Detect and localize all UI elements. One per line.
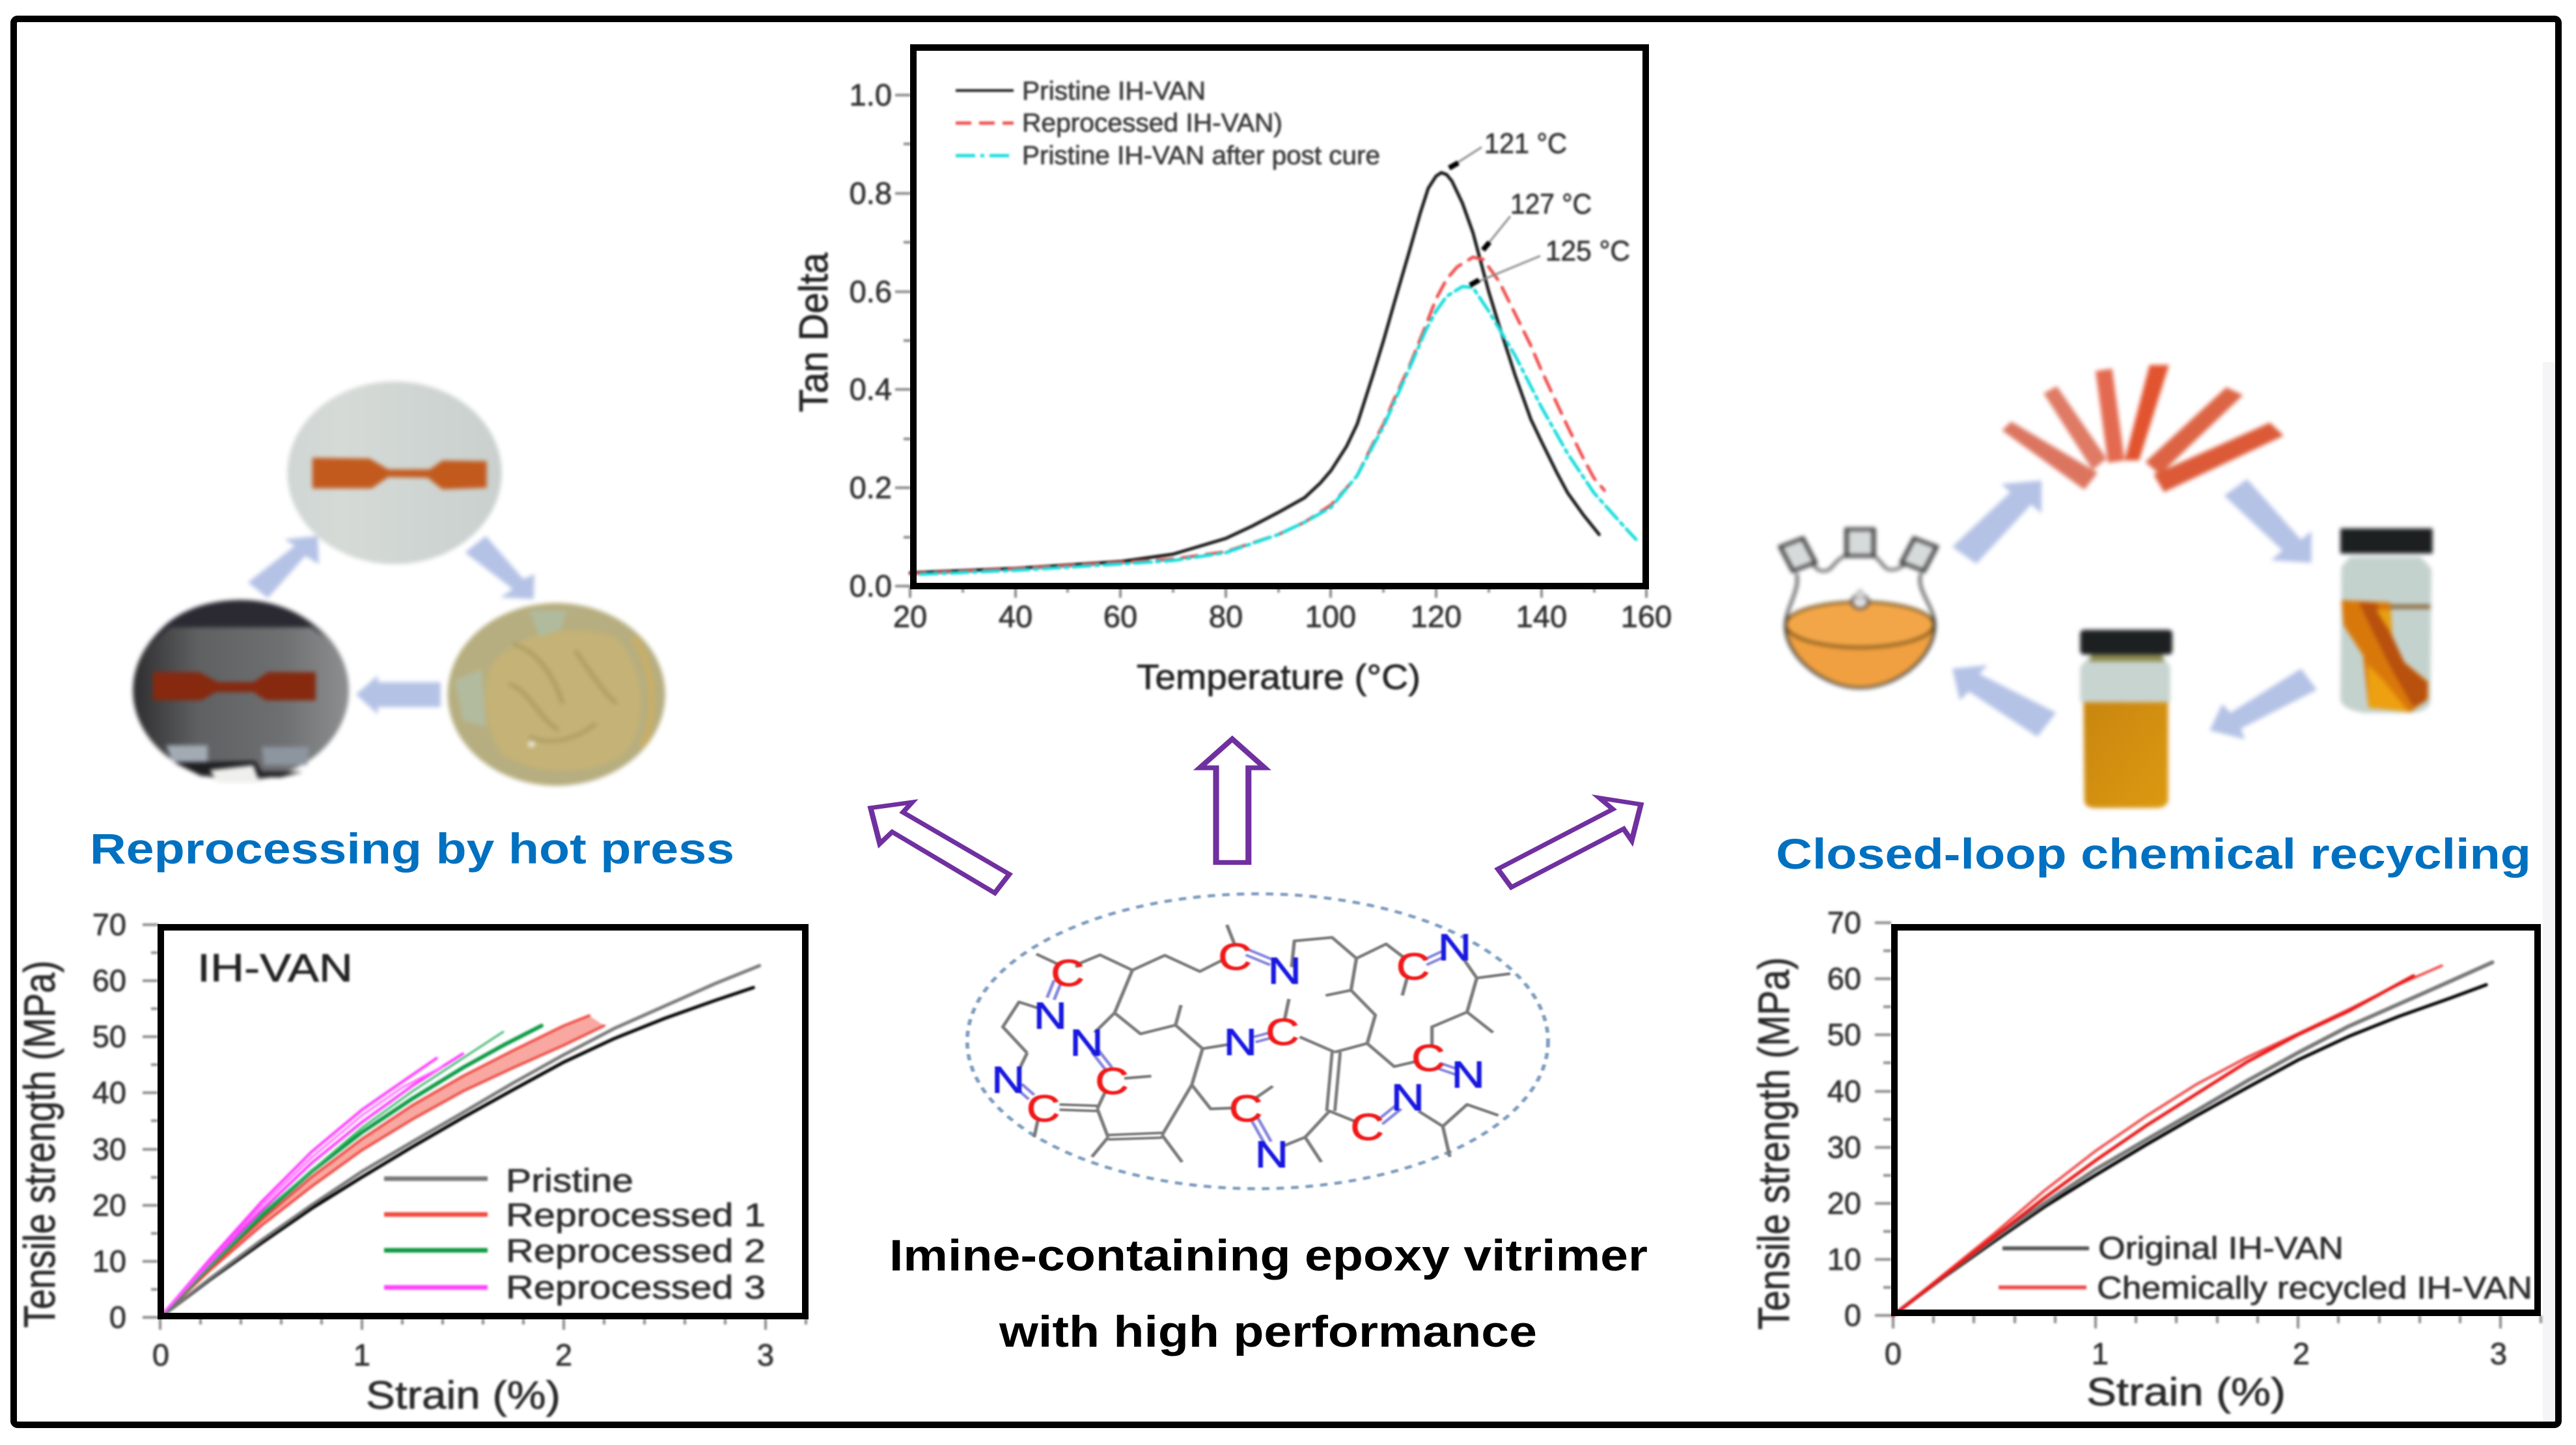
carbon atoms: C — [1396, 945, 1430, 987]
legend: Original IH-VAN — [2098, 1231, 2344, 1266]
arrow: specimen to powder — [465, 536, 534, 599]
y axis numbers: 70 — [1827, 905, 1861, 940]
photo: vial of recycled solution — [2080, 630, 2172, 808]
arrow: to reprocessing — [870, 802, 1009, 893]
x axis numbers: 80 — [1209, 599, 1243, 634]
x axis numbers: 2 — [555, 1338, 572, 1372]
x axis numbers: 40 — [999, 599, 1032, 634]
carbon atoms: C — [1350, 1106, 1384, 1148]
nitrogen atoms: N — [1070, 1022, 1103, 1064]
x axis numbers: 160 — [1621, 599, 1672, 634]
double bonds — [1060, 1052, 1340, 1140]
single bonds — [1003, 925, 1510, 1162]
legend — [1999, 1231, 2532, 1306]
y axis numbers: 0.0 — [850, 568, 892, 603]
nitrogen atoms: N — [1438, 926, 1471, 968]
nitrogen atoms: N — [1391, 1076, 1424, 1118]
photo: ground powder disc — [448, 603, 665, 786]
y axis title: Tan Delta — [792, 253, 837, 412]
y axis title: Tensile strength (MPa) — [15, 961, 64, 1328]
heading: reprocessing by hot press: Reprocessing by hot press — [90, 824, 734, 873]
x axis title: Strain (%) — [366, 1373, 561, 1417]
x axis numbers: 60 — [1103, 599, 1137, 634]
curves — [1893, 962, 2493, 1315]
y axis numbers: 60 — [1827, 961, 1861, 996]
legend: Pristine IH-VAN — [1022, 77, 1206, 105]
chart: chemically recycled tensile curves — [1749, 905, 2541, 1414]
panel: closed-loop chemical recycling cycle — [1780, 365, 2433, 808]
y axis numbers: 0.4 — [850, 372, 892, 406]
legend: Reprocessed 2 — [506, 1233, 766, 1269]
arrow: to tan delta chart — [1200, 739, 1265, 862]
legend: Reprocessed 3 — [506, 1269, 766, 1306]
heading: closed-loop chemical recycling: Closed-loop chemical recycling — [1776, 830, 2531, 878]
photo: vial with dissolving strip — [2340, 529, 2433, 713]
x axis numbers: 100 — [1305, 599, 1356, 634]
y axis numbers: 0.2 — [850, 470, 892, 505]
carbon atoms: C — [1266, 1011, 1299, 1053]
y axis numbers — [92, 907, 126, 1334]
y axis numbers — [1827, 905, 1861, 1332]
x axis numbers: 2 — [2293, 1336, 2310, 1371]
photo: disc with dog-bone specimen — [287, 382, 502, 564]
y axis numbers: 0.6 — [850, 274, 892, 309]
y axis numbers: 40 — [92, 1075, 126, 1110]
nitrogen atoms — [991, 926, 1485, 1175]
nitrogen atoms: N — [1034, 994, 1067, 1037]
carbon atoms: C — [1218, 936, 1252, 978]
x axis numbers: 120 — [1411, 599, 1461, 634]
carbon atoms: C — [1027, 1087, 1060, 1130]
peak annotations — [1449, 128, 1630, 285]
nitrogen atoms: N — [1451, 1054, 1485, 1095]
y axis numbers: 1.0 — [850, 77, 892, 112]
y axis numbers: 10 — [1827, 1242, 1861, 1276]
y axis numbers: 50 — [1827, 1017, 1861, 1052]
title: imine-containing epoxy vitrimer: with high performance — [999, 1307, 1537, 1356]
y axis numbers: 70 — [92, 907, 126, 942]
x axis numbers — [152, 1338, 774, 1372]
panel label: IH-VAN — [197, 946, 353, 990]
x axis numbers — [893, 599, 1672, 634]
photo: cut resin strips — [2002, 365, 2284, 492]
panel: imine polymer network and hollow arrows — [870, 739, 1641, 1188]
y axis numbers: 50 — [92, 1019, 126, 1054]
x axis numbers: 0 — [1885, 1336, 1902, 1371]
dashed ellipse with molecule — [967, 894, 1548, 1188]
nitrogen atoms: N — [991, 1059, 1025, 1101]
x axis numbers: 1 — [2092, 1336, 2109, 1371]
arrow: press to specimen — [248, 536, 319, 598]
arrow: flask to strips — [1952, 481, 2042, 564]
legend — [384, 1162, 766, 1306]
panel: reprocessing by hot press cycle — [133, 382, 665, 786]
arrow: to chemical recycling — [1498, 798, 1641, 888]
x axis numbers: 140 — [1516, 599, 1567, 634]
legend — [956, 77, 1380, 170]
y axis title: Tensile strength (MPa) — [1749, 957, 1799, 1330]
arrow: dissolving vial to solution vial — [2209, 669, 2317, 739]
y axis numbers: 20 — [1827, 1186, 1861, 1220]
y axis numbers: 20 — [92, 1188, 126, 1222]
icon: three-neck flask — [1780, 529, 1937, 688]
title: imine-containing epoxy vitrimer — [889, 1231, 1648, 1356]
nitrogen atoms: N — [1255, 1133, 1288, 1175]
legend: Pristine — [506, 1162, 633, 1199]
nitrogen atoms: N — [1268, 949, 1301, 992]
arrow: solution vial to flask — [1952, 665, 2056, 737]
chart: tan delta versus temperature — [792, 48, 1672, 697]
legend: Reprocessed 1 — [506, 1197, 766, 1233]
x axis numbers: 0 — [152, 1338, 169, 1372]
carbon atoms: C — [1051, 952, 1085, 994]
y axis numbers — [850, 77, 892, 603]
x axis numbers: 1 — [353, 1338, 370, 1372]
y axis numbers: 0 — [1844, 1298, 1861, 1332]
x axis numbers: 3 — [2490, 1336, 2507, 1371]
y axis numbers: 10 — [92, 1244, 126, 1278]
chart: IH-VAN reprocessed tensile curves — [15, 907, 806, 1417]
carbon atoms: C — [1411, 1037, 1445, 1079]
legend: Chemically recycled IH-VAN — [2097, 1271, 2532, 1306]
arrow: powder to press — [356, 675, 441, 714]
curves — [160, 966, 760, 1317]
title: imine-containing epoxy vitrimer: Imine-containing epoxy vitrimer — [889, 1231, 1648, 1280]
photo: steel mould with specimen — [133, 600, 349, 783]
carbon atoms: C — [1095, 1060, 1129, 1102]
y axis numbers: 30 — [1827, 1130, 1861, 1164]
x axis numbers — [1885, 1336, 2507, 1371]
carbon atoms: C — [1229, 1087, 1262, 1130]
legend: Reprocessed IH-VAN) — [1022, 109, 1282, 137]
nitrogen atoms: N — [1224, 1020, 1257, 1063]
curves — [910, 173, 1636, 574]
y axis numbers: 60 — [92, 963, 126, 998]
legend: Pristine IH-VAN after post cure — [1022, 141, 1380, 170]
y axis numbers: 30 — [92, 1132, 126, 1166]
peak annotations: 121 °C — [1484, 128, 1567, 160]
y axis numbers: 0 — [109, 1300, 126, 1334]
x axis title: Temperature (°C) — [1137, 658, 1420, 697]
x axis numbers: 20 — [893, 599, 927, 634]
peak annotations: 125 °C — [1545, 235, 1630, 267]
carbon atoms — [1027, 936, 1445, 1148]
arrow: strips to dissolving vial — [2224, 479, 2312, 563]
peak annotations: 127 °C — [1510, 188, 1592, 220]
y axis numbers: 40 — [1827, 1074, 1861, 1108]
y axis numbers: 0.8 — [850, 176, 892, 210]
x axis numbers: 3 — [757, 1338, 774, 1372]
x axis title: Strain (%) — [2086, 1370, 2286, 1414]
